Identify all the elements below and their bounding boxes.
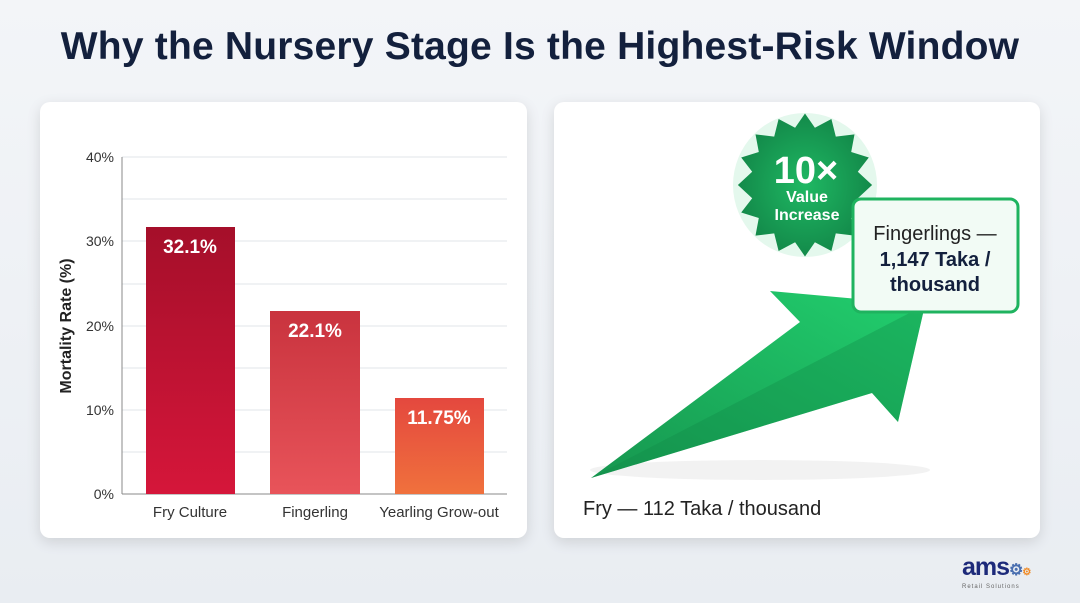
callout: fingerlings price <box>853 199 1018 312</box>
title: Why the Nursery Stage Is the Highest-Risk Window <box>61 25 1019 68</box>
badge: 10x <box>733 113 877 257</box>
arrow <box>590 291 930 480</box>
panel: mortality chart <box>40 102 527 538</box>
badge: 10x: Value <box>786 189 828 206</box>
callout: fingerlings price: thousand <box>890 274 980 296</box>
bar: Yearling <box>395 398 484 494</box>
bar: Fingerling <box>270 311 360 494</box>
badge: 10x: 10× <box>774 150 838 192</box>
x labels <box>153 504 500 521</box>
y axis title: Mortality Rate (%) <box>58 258 75 394</box>
x labels: Fry Culture <box>153 504 227 521</box>
bar: Fingerling: 22.1% <box>288 321 342 342</box>
label: fry price: Fry — 112 Taka / thousand <box>583 498 821 520</box>
bar: Fry Culture <box>146 227 235 494</box>
callout: fingerlings price: 1,147 Taka / <box>880 249 991 271</box>
y axis labels <box>86 149 114 502</box>
logo: ams⚙⚙ <box>962 553 1030 581</box>
y axis labels: 40% <box>86 149 114 165</box>
callout: fingerlings price: Fingerlings — <box>873 223 997 245</box>
y axis labels: 20% <box>86 318 114 334</box>
bar: Fry Culture: 32.1% <box>163 237 217 258</box>
logo: Retail Solutions <box>962 584 1020 590</box>
x labels: Yearling Grow-out <box>379 504 500 521</box>
bar: Yearling: 11.75% <box>407 408 471 429</box>
badge: 10x: Increase <box>775 207 840 224</box>
x labels: Fingerling <box>282 504 348 521</box>
y axis labels: 0% <box>94 486 114 502</box>
y axis labels: 30% <box>86 233 114 249</box>
panel: value increase <box>554 102 1040 538</box>
y axis labels: 10% <box>86 402 114 418</box>
